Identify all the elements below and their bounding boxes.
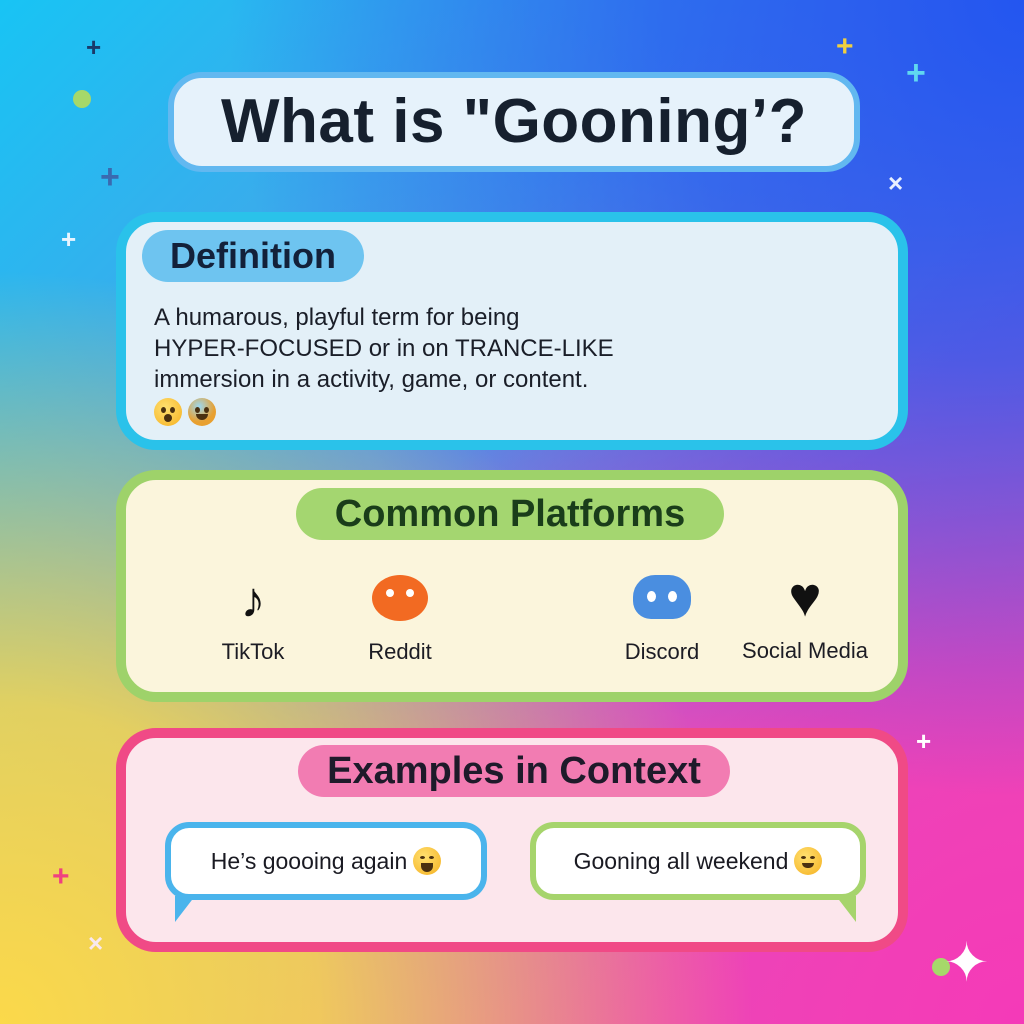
icon: discord: Discord	[625, 639, 699, 664]
heading: platforms	[296, 488, 724, 540]
icon: tiktok: TikTok	[222, 639, 284, 664]
decorative sparkles: ×	[888, 168, 903, 198]
decorative sparkles: +	[916, 726, 931, 756]
icon: reddit	[368, 575, 432, 664]
heading: platforms: Common Platforms	[335, 493, 685, 535]
text: definition body: HYPER-FOCUSED or in on TRANCE-LIKE	[154, 335, 614, 362]
decorative sparkles: ✦	[944, 933, 989, 993]
panel: definition	[116, 212, 908, 450]
decorative sparkles: +	[836, 30, 854, 63]
icon: social media: ♥	[788, 565, 822, 628]
text: definition body: immersion in a activity, game, or content.	[154, 366, 588, 393]
title	[168, 72, 860, 172]
decorative sparkles: ×	[88, 928, 103, 958]
decorative sparkles: +	[52, 860, 70, 893]
decorative sparkles: +	[86, 32, 101, 62]
decorative sparkles: +	[100, 158, 120, 196]
speech bubble: green: Gooning all weekend	[574, 848, 788, 874]
icon: reddit: Reddit	[368, 639, 432, 664]
heading: examples: Examples in Context	[327, 750, 701, 792]
emoji faces	[154, 398, 216, 426]
speech bubble: blue: He’s goooing again	[211, 848, 407, 874]
speech bubble: blue	[165, 822, 487, 900]
speech bubble: green	[530, 822, 866, 900]
icon: tiktok: ♪	[240, 572, 266, 628]
icon: tiktok	[222, 572, 284, 664]
heading: examples	[298, 745, 730, 797]
text: definition body	[154, 304, 614, 393]
heading: definition: Definition	[170, 235, 336, 276]
decorative sparkles: +	[906, 54, 926, 92]
text: definition body: A humarous, playful term for being	[154, 304, 520, 331]
panel: common platforms	[116, 470, 908, 702]
title: What is "Gooning’?	[221, 87, 807, 156]
heading: definition	[142, 230, 364, 282]
icon: social media: Social Media	[742, 638, 868, 663]
icon: social media	[742, 565, 868, 663]
decorative sparkles: +	[61, 224, 76, 254]
icon: discord	[625, 575, 699, 664]
panel: examples in context	[116, 728, 908, 952]
